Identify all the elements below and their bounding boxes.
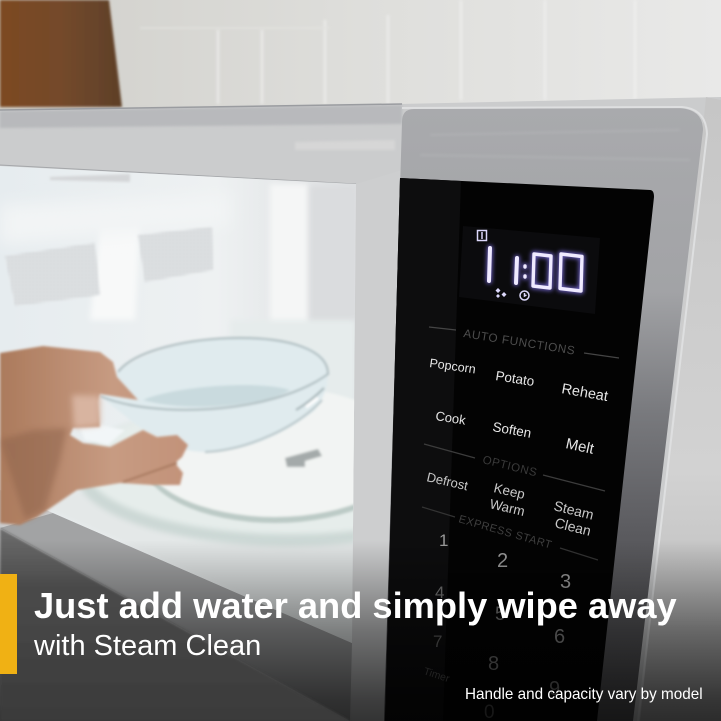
wall with tiles (0, 0, 721, 110)
auto functions section: Cook (435, 408, 467, 428)
digital display (459, 226, 600, 314)
countertop (0, 528, 350, 721)
auto functions section: AUTO FUNCTIONS (463, 326, 576, 358)
steel control panel (384, 107, 707, 721)
vent mesh right (138, 227, 213, 282)
auto functions section: Soften (491, 419, 533, 441)
options section: Steam (552, 497, 595, 523)
options section (424, 444, 605, 539)
auto functions section (429, 326, 619, 458)
express start keypad: 2 (497, 550, 508, 572)
headline: Just add water and simply wipe away (34, 585, 677, 626)
express start keypad (422, 507, 598, 721)
subheading: with Steam Clean (34, 630, 261, 662)
hand (0, 346, 188, 525)
auto functions section: Potato (495, 368, 535, 389)
express start keypad: Timer (422, 665, 451, 685)
black glass panel (385, 178, 654, 721)
auto functions section: Melt (564, 435, 596, 458)
clock digits 11:00 (489, 248, 582, 291)
express start keypad: 6 (554, 626, 565, 648)
options section: Warm (488, 496, 526, 519)
turntable outer ring (81, 442, 353, 547)
options section: Defrost (425, 469, 470, 493)
disclaimer note: Handle and capacity vary by model (465, 686, 703, 703)
vent mesh left (5, 243, 100, 306)
bottom dark gradient (0, 540, 721, 721)
side wall tint (270, 320, 354, 398)
express start keypad: 1 (439, 531, 448, 550)
express start keypad: 8 (488, 653, 499, 675)
auto functions section: Popcorn (429, 356, 477, 376)
yellow accent bar (0, 574, 17, 674)
display icons (478, 230, 529, 300)
express start keypad: 7 (433, 632, 442, 651)
express start keypad: EXPRESS START (457, 513, 553, 552)
options section: Clean (553, 514, 593, 539)
glass bowl with water (80, 338, 328, 452)
options section: OPTIONS (481, 454, 538, 479)
options section: Keep (492, 480, 526, 502)
oven floor (74, 496, 353, 578)
auto functions section: Reheat (560, 381, 609, 405)
express start keypad: 9 (549, 678, 560, 700)
turntable plate (153, 393, 354, 524)
express start keypad: 4 (435, 583, 444, 602)
door lower frame (0, 513, 352, 721)
express start keypad: 5 (495, 604, 506, 625)
wooden board (0, 0, 122, 107)
door window interior (0, 166, 356, 643)
express start keypad: 3 (560, 571, 571, 593)
